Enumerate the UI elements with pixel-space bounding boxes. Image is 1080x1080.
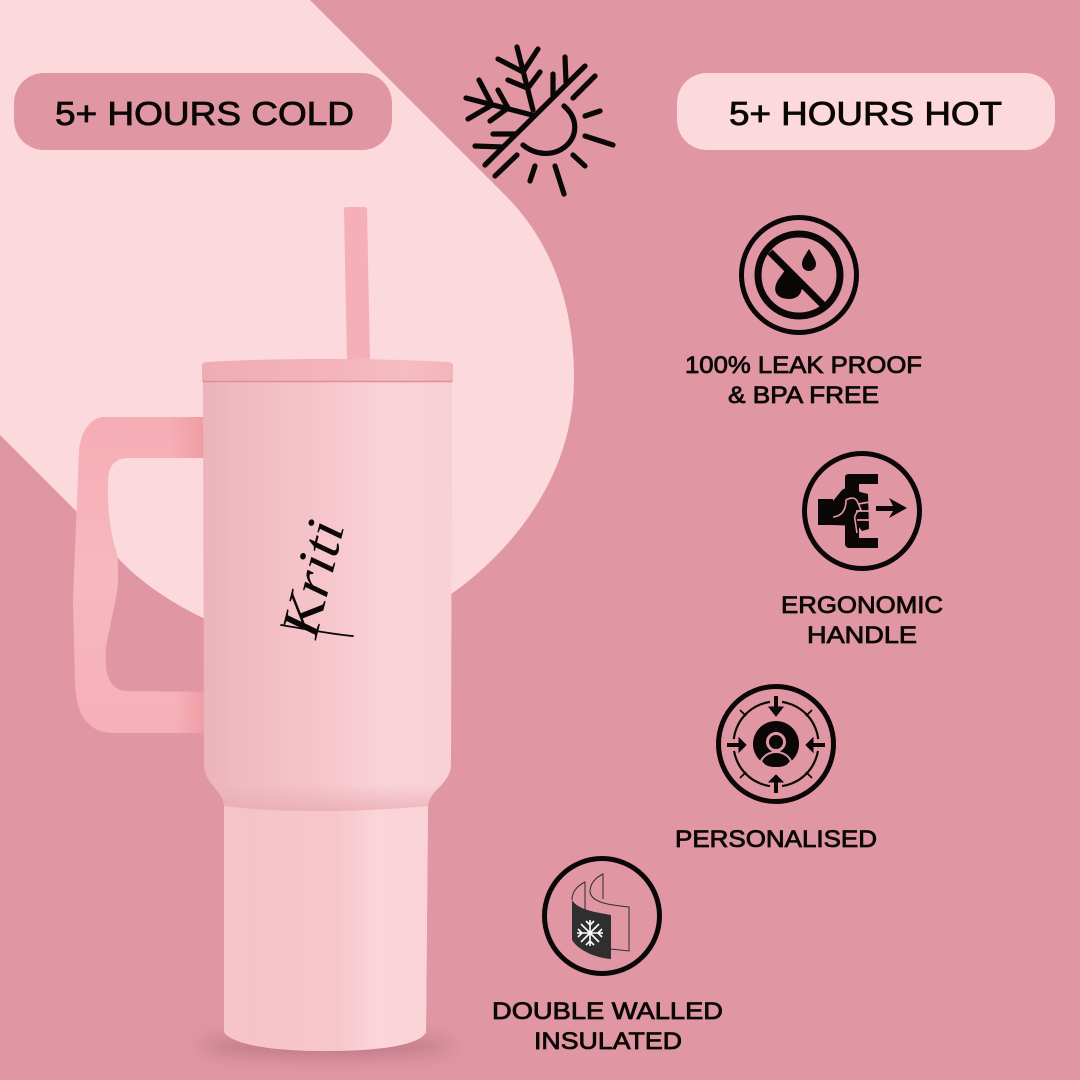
feature: double walled insulated: [492, 858, 723, 1055]
body: [203, 380, 452, 1051]
label line 2: INSULATED: [534, 1028, 682, 1055]
pill: 5+ hours hot: 5+ HOURS HOT: [729, 95, 1002, 132]
lower base: [224, 806, 428, 1051]
shoulder band shading: [212, 784, 443, 811]
handle: [73, 417, 205, 733]
label: ERGONOMIC: [781, 592, 943, 619]
label: 100% LEAK PROOF: [685, 352, 922, 379]
lid: [202, 359, 453, 382]
icon: double wall: [544, 858, 660, 974]
feature: personalised: [675, 686, 877, 853]
label line 2: & BPA FREE: [728, 382, 879, 409]
icon: no drops: [742, 218, 856, 332]
straw: [344, 207, 370, 362]
tumbler shadow: [198, 1035, 454, 1057]
icon: person target: [718, 686, 834, 802]
icon: hand gripping handle: [804, 454, 920, 568]
label: DOUBLE WALLED: [492, 998, 723, 1025]
pill: 5+ hours hot: [677, 73, 1055, 150]
lid seam: [203, 380, 452, 382]
name: Kriti: Kriti: [269, 514, 356, 644]
icon: snowflake and sun: [466, 47, 613, 194]
pill: 5+ hours cold: 5+ HOURS COLD: [55, 95, 354, 132]
feature: ergonomic handle: [781, 454, 943, 649]
light blob shape: [0, 0, 574, 638]
label line 2: HANDLE: [807, 622, 917, 649]
tumbler: [73, 207, 454, 1057]
feature: leak proof: [685, 218, 922, 409]
pill: 5+ hours cold: [14, 73, 392, 150]
label: PERSONALISED: [675, 826, 877, 853]
